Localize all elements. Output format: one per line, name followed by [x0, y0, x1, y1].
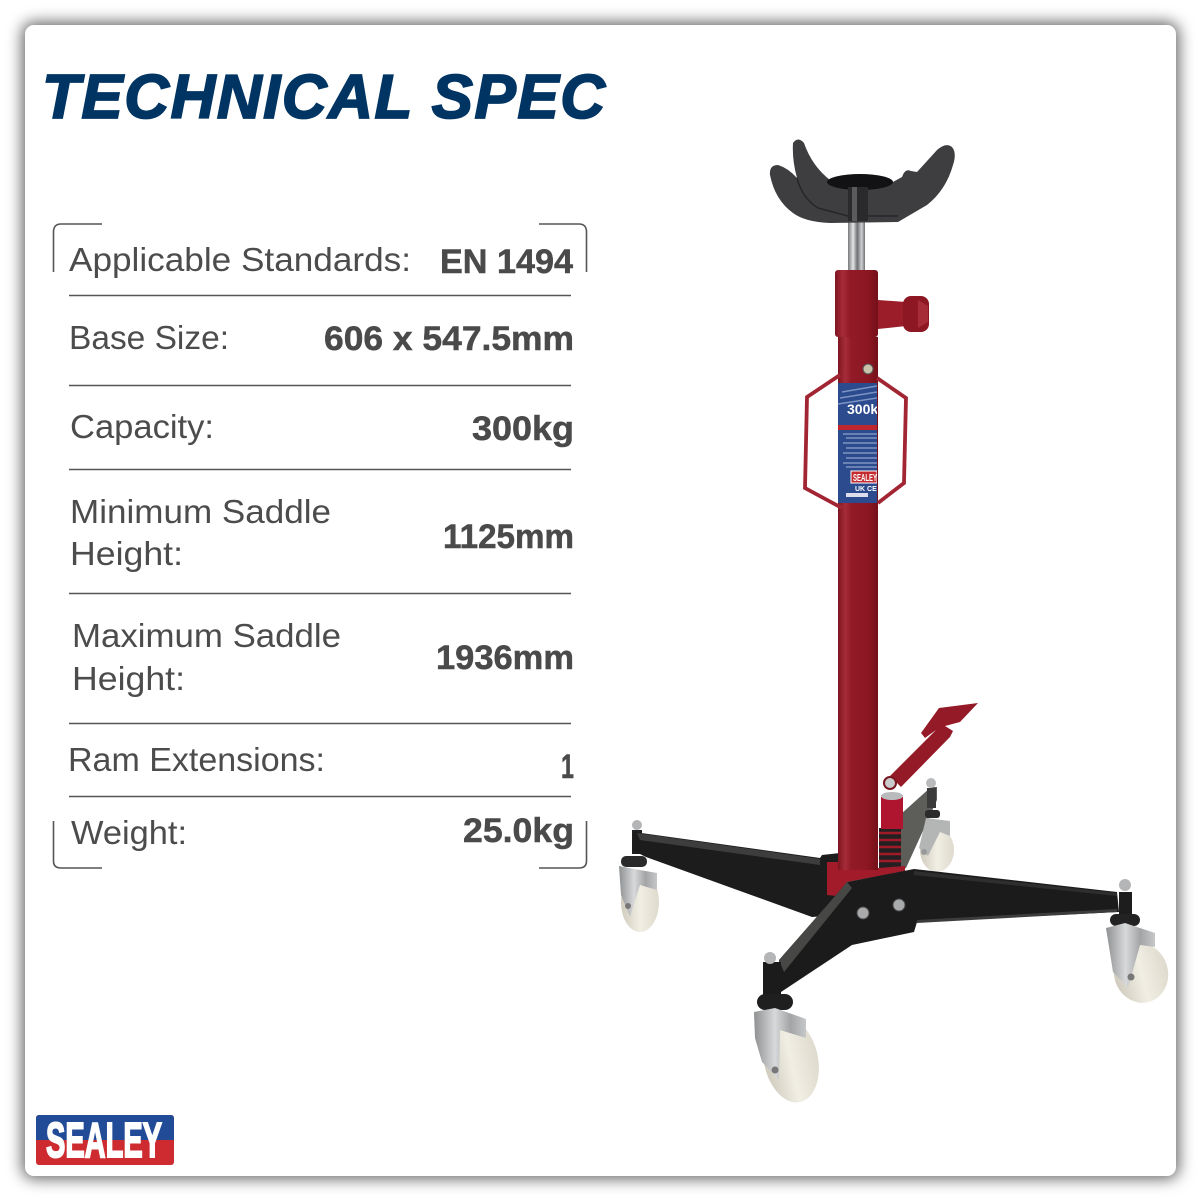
row: base size: Base Size:: [69, 319, 229, 356]
specification table: [54, 224, 586, 868]
right caster: [1106, 879, 1175, 1009]
base front arms: [779, 869, 1119, 992]
base rear leg: [632, 832, 840, 917]
row: applicable standards: Applicable Standards:: [69, 241, 411, 278]
row: weight: 25.0kg: [463, 812, 574, 850]
column warning label: 300kg: [847, 401, 887, 417]
pump and spring: [879, 777, 903, 868]
row: maximum saddle height: 1936mm: [436, 639, 574, 677]
row: ram extensions: Ram Extensions:: [68, 741, 325, 778]
main column: [805, 220, 929, 872]
left caster: [619, 820, 659, 932]
row: capacity: 300kg: [472, 410, 574, 448]
row: minimum saddle height: Minimum Saddle: [70, 493, 331, 530]
row: weight: Weight:: [71, 814, 187, 851]
mounting bolts: [857, 899, 905, 919]
back caster: [899, 778, 954, 872]
column warning label: [838, 383, 877, 503]
lock bolt: [863, 364, 873, 374]
hexagonal handle: [805, 375, 906, 508]
row: capacity: Capacity:: [70, 408, 214, 445]
row: minimum saddle height: 1125mm: [443, 518, 574, 556]
saddle: [770, 140, 955, 223]
transmission jack product illustration: [619, 140, 1175, 1108]
row: capacity: [70, 408, 574, 448]
column warning label: SEALEY: [853, 473, 877, 484]
row: weight: [71, 812, 574, 851]
row: ram extensions: [68, 741, 574, 786]
row: base size: 606 x 547.5mm: [324, 320, 574, 358]
table corner brackets: [54, 224, 586, 868]
row: ram extensions: 1: [561, 748, 574, 786]
row: maximum saddle height: Height:: [72, 660, 185, 697]
front caster: [754, 952, 826, 1108]
row: minimum saddle height: [70, 493, 574, 572]
row: minimum saddle height: Height:: [70, 535, 183, 572]
foot pedal: [890, 703, 978, 787]
row: applicable standards: [69, 241, 573, 281]
red base bracket: [827, 862, 905, 896]
title: TECHNICAL SPEC: [42, 63, 606, 132]
Sealey logo: [36, 1114, 174, 1168]
row: maximum saddle height: [72, 617, 574, 697]
hydraulic knob: [878, 296, 929, 332]
row: applicable standards: EN 1494: [440, 243, 573, 281]
column warning label: UK CE: [855, 486, 877, 493]
row: maximum saddle height: Maximum Saddle: [72, 617, 341, 654]
Sealey logo: SEALEY: [46, 1114, 162, 1168]
row: base size: [69, 319, 574, 358]
